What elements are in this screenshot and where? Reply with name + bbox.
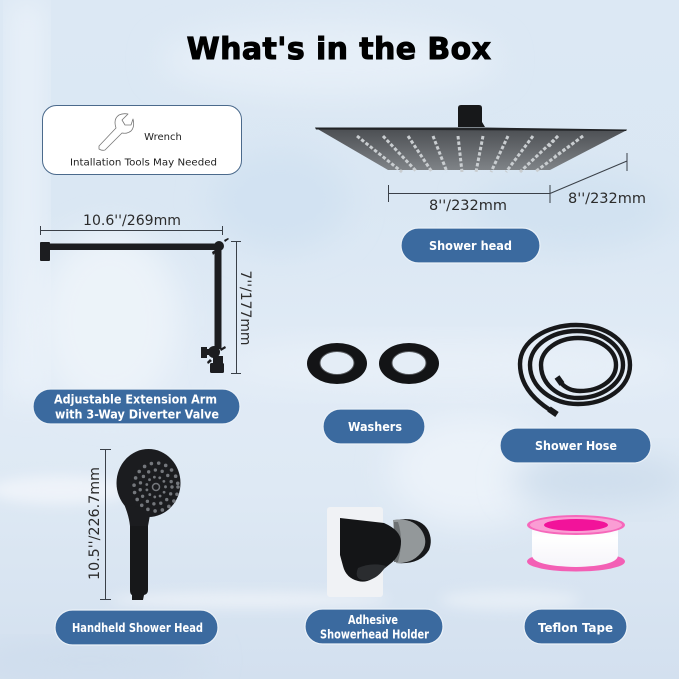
pill: holder: Showerhead Holder: [320, 628, 429, 642]
teflon tape: [527, 515, 625, 572]
handheld shower head: [116, 449, 180, 600]
dimension: arm height: [231, 242, 253, 374]
pill: teflon tape: Teflon Tape: [538, 621, 613, 635]
shower hose: [520, 325, 630, 414]
pill: washers: [323, 409, 425, 444]
pill: extension arm: Adjustable Extension Arm: [54, 392, 217, 406]
washer right: [379, 343, 439, 384]
dimension: arm width: 10.6''/269mm: [83, 213, 181, 229]
panel: wrench note: [42, 106, 242, 174]
label: wrench: Wrench: [144, 132, 182, 143]
washer left: [307, 343, 367, 384]
shower head: [315, 105, 627, 172]
dimension: arm width: [40, 213, 222, 235]
dimension: arm height: 7''/177mm: [237, 270, 253, 346]
pill: extension arm: with 3-Way Diverter Valve: [55, 408, 219, 422]
body: [340, 518, 401, 582]
nozzles: [357, 136, 583, 172]
pill: teflon tape: [524, 609, 627, 644]
pill: shower hose: [500, 428, 651, 463]
pill: handheld: Handheld Shower Head: [72, 621, 203, 635]
washers: [307, 343, 439, 384]
pill: shower head: Shower head: [429, 239, 512, 253]
dimension: handheld height: 10.5''/226.7mm: [87, 467, 103, 580]
depth label: 8''/232mm: [568, 191, 646, 207]
pill: handheld: [55, 610, 218, 645]
pill: shower head: [401, 228, 540, 263]
pill: extension arm: [33, 389, 240, 424]
rear ring: [395, 519, 431, 563]
extension arm: [40, 238, 229, 373]
neck: [458, 105, 485, 127]
pill: washers: Washers: [348, 420, 402, 434]
adhesive holder: [327, 507, 431, 597]
plate: [327, 507, 383, 597]
nozzles: [134, 463, 178, 511]
pill: holder: Adhesive: [348, 613, 398, 627]
plate: [315, 128, 627, 170]
note text: Intallation Tools May Needed: [70, 158, 217, 168]
title: What's in the Box: [187, 32, 491, 67]
pill: holder: [305, 609, 443, 644]
width label: 8''/232mm: [429, 198, 507, 214]
pill: shower hose: Shower Hose: [535, 439, 617, 453]
icon: wrench: [99, 114, 134, 150]
dimension: shower head width: [388, 153, 646, 214]
dimension: handheld height: [87, 450, 111, 600]
